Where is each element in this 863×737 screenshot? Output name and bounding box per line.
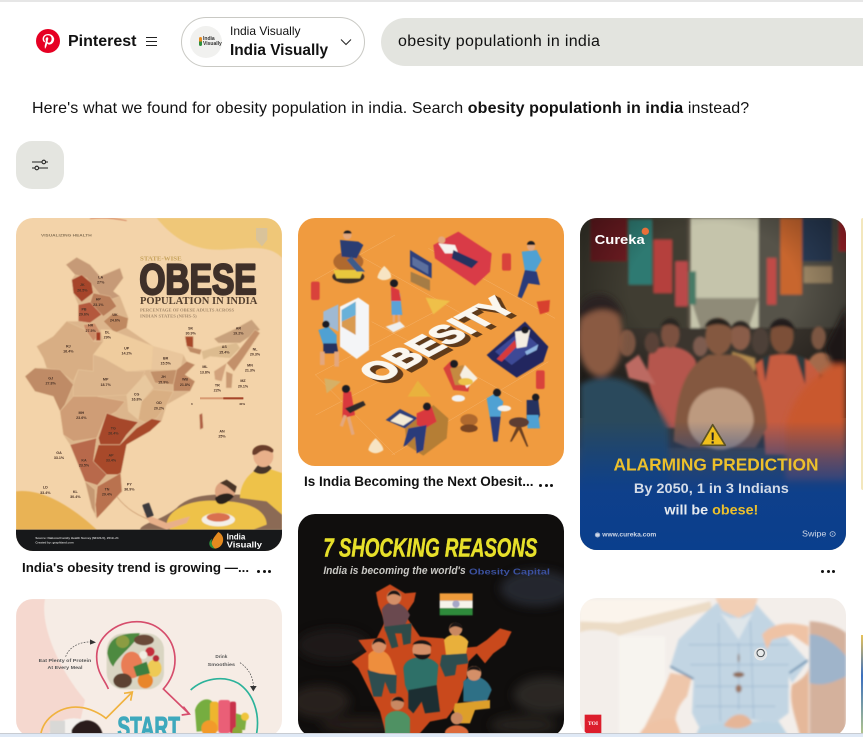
map state labels: AN bbox=[219, 430, 225, 434]
person teal shirt bbox=[453, 666, 492, 723]
pin: weight loss start bbox=[16, 599, 282, 737]
map state labels: 26.5% bbox=[77, 288, 88, 292]
map state labels: 18.7% bbox=[100, 383, 112, 387]
map state labels: 33.1% bbox=[54, 456, 65, 460]
map state labels: 22% bbox=[214, 388, 222, 392]
legend: 0 bbox=[191, 402, 193, 406]
map state labels: LA bbox=[98, 276, 103, 280]
map state labels bbox=[40, 276, 261, 499]
child arm bbox=[640, 673, 692, 737]
map state labels: 29.4% bbox=[102, 493, 113, 497]
heading: obese population: STATE-WISE bbox=[140, 256, 182, 263]
illustration: couple on sofa bbox=[140, 445, 282, 530]
subheadline highlight: Obesity Capital bbox=[469, 567, 550, 577]
fries bbox=[537, 300, 550, 314]
couple at grill bbox=[487, 389, 540, 447]
icon: warning triangle bbox=[701, 425, 725, 447]
blurred hand right bbox=[810, 621, 846, 737]
floor grid bbox=[315, 235, 555, 455]
map state labels: MH bbox=[78, 411, 85, 415]
map state labels: AR bbox=[236, 327, 241, 331]
account avatar: India Visually bbox=[203, 36, 222, 47]
caption: smoothies bbox=[208, 654, 235, 667]
map state labels: JK bbox=[80, 283, 85, 287]
brand name: Pinterest bbox=[68, 33, 136, 50]
map state labels: AS bbox=[222, 345, 227, 349]
blue gradient overlay bbox=[580, 421, 846, 550]
search bar: obesity populationh in india bbox=[398, 33, 600, 50]
swipe hint: Swipe ⊙ bbox=[802, 530, 836, 539]
map state labels: DL bbox=[105, 330, 111, 334]
woman on scale bbox=[386, 279, 405, 332]
map state labels: ML bbox=[202, 365, 208, 369]
neighbouring column edge top bbox=[861, 218, 863, 490]
people illustration bbox=[367, 590, 492, 737]
icons: arrowheads bbox=[90, 639, 257, 691]
map state labels: 15.5% bbox=[160, 361, 172, 365]
source kicker: VISUALIZING HEALTH bbox=[41, 233, 93, 237]
laptop on blue couch bbox=[487, 322, 548, 378]
belly bbox=[724, 715, 752, 728]
map state labels: 27% bbox=[97, 280, 105, 284]
stethoscope bbox=[755, 648, 767, 660]
map state labels: GJ bbox=[48, 376, 53, 380]
map state labels: 23.5% bbox=[79, 464, 90, 468]
photo vignette bbox=[580, 218, 846, 418]
map state labels: 23.1% bbox=[93, 303, 104, 307]
caption: every meal: At Every Meal bbox=[48, 665, 82, 670]
map state labels: JH bbox=[161, 375, 166, 379]
search bar bbox=[381, 18, 863, 66]
smoke clouds bbox=[290, 570, 580, 735]
map state labels: 15.4% bbox=[219, 350, 230, 354]
top border line bbox=[0, 0, 863, 2]
pizza slice 2 bbox=[408, 381, 431, 397]
neck bbox=[715, 598, 758, 618]
pin: obese population map bbox=[16, 218, 282, 551]
map state labels: 14.2% bbox=[121, 352, 133, 356]
map of India bbox=[25, 257, 260, 519]
filter button bbox=[16, 141, 64, 189]
logo: TOI: TOI bbox=[588, 721, 599, 727]
pink blob bbox=[16, 599, 85, 737]
sleeves bbox=[670, 660, 808, 679]
person purple shirt bbox=[382, 590, 412, 648]
sandwich bbox=[324, 378, 341, 393]
map state labels: 13.8% bbox=[200, 370, 211, 374]
map state labels: 21.8% bbox=[180, 383, 191, 387]
map state labels: MP bbox=[103, 378, 109, 382]
plaid lines bbox=[689, 621, 789, 721]
map state labels: 27.5% bbox=[85, 329, 97, 333]
map state labels: CG bbox=[134, 392, 140, 396]
blurred photo bbox=[580, 598, 846, 737]
caption: protein: Eat Plenty of Protein bbox=[39, 658, 91, 663]
pin: 7 shocking reasons bbox=[298, 514, 564, 733]
illustrations bbox=[311, 231, 550, 456]
icon: chevron bbox=[340, 39, 352, 46]
word: OBESITY: OBESITY bbox=[349, 292, 526, 388]
map state labels: 20.1% bbox=[238, 384, 249, 388]
blurred left man bbox=[578, 294, 669, 488]
subheadline: By 2050, 1 in 3 Indians bbox=[634, 481, 789, 496]
woman portrait bbox=[47, 718, 103, 737]
person on burger bbox=[332, 231, 365, 283]
collar V shadow bbox=[720, 613, 753, 640]
map state labels: 29% bbox=[104, 335, 112, 339]
map state labels: WB bbox=[182, 378, 188, 382]
map state labels: BR bbox=[163, 356, 169, 360]
heading: obese population: POPULATION IN INDIA bbox=[140, 296, 258, 307]
icon: crest bbox=[256, 228, 267, 246]
sofa sleeper bbox=[433, 232, 492, 286]
street backdrop photo bbox=[580, 218, 849, 448]
account label: India Visually bbox=[230, 24, 300, 38]
map state labels: NL bbox=[253, 347, 258, 351]
dumpling 2 bbox=[368, 438, 383, 453]
man walking bbox=[518, 241, 542, 298]
map state labels: 33.4% bbox=[106, 459, 117, 463]
map state labels: PB bbox=[81, 308, 87, 312]
logo: India Visually bbox=[209, 532, 263, 549]
pin 2 options bbox=[539, 484, 553, 487]
map state labels: UK bbox=[112, 313, 118, 317]
legend bbox=[191, 397, 245, 406]
logo: India Visually: India bbox=[227, 533, 246, 542]
pin 2 title: Is India Becoming the Next Obesit... bbox=[304, 474, 534, 489]
burger bbox=[460, 414, 478, 432]
person orange shirt bbox=[367, 638, 397, 697]
map state labels: 33.4% bbox=[40, 491, 51, 495]
caption: smoothies: Smoothies bbox=[208, 662, 235, 667]
subheadline bbox=[634, 481, 789, 518]
map state labels: 24.6% bbox=[110, 318, 121, 322]
doctor's arm bbox=[762, 624, 809, 650]
footer bar: Created by: graphland.com bbox=[35, 541, 74, 545]
can right lower bbox=[536, 370, 545, 389]
map state labels: PY bbox=[127, 482, 132, 486]
map state labels: MN bbox=[247, 364, 253, 368]
map state labels: 30.4% bbox=[70, 495, 81, 499]
footer bar bbox=[16, 530, 282, 551]
map state labels: AP bbox=[108, 453, 114, 457]
map state labels: 20.3% bbox=[250, 352, 261, 356]
pin 3 options bbox=[821, 570, 835, 573]
caption: smoothies: Drink bbox=[215, 654, 228, 659]
icon: sliders bbox=[32, 160, 48, 170]
pin: alarming prediction bbox=[580, 218, 846, 550]
pin: child obesity photo bbox=[580, 598, 846, 733]
headline: ALARMING PREDICTION bbox=[613, 455, 818, 475]
dumpling bbox=[377, 266, 391, 280]
map state labels: UP bbox=[124, 347, 130, 351]
pin: obesity isometric illustration bbox=[298, 218, 564, 466]
person yellow shirt bbox=[440, 622, 468, 677]
subheadline: India is becoming the world's bbox=[323, 565, 466, 577]
crowd photo bbox=[618, 318, 839, 455]
blurred foreground figures bbox=[578, 294, 846, 488]
map state labels: 30.9% bbox=[185, 332, 197, 336]
person in egg chair bbox=[443, 360, 478, 402]
map state labels: 29.6% bbox=[79, 312, 90, 316]
fridge with person bbox=[318, 298, 369, 367]
smoothies illustration bbox=[195, 699, 249, 737]
tv bbox=[410, 250, 432, 291]
icon: menu bbox=[146, 37, 157, 46]
heading: obese population: PERCENTAGE OF OBESE ADULTS ACROSS bbox=[140, 308, 235, 313]
website: ◉ www.cureka.com bbox=[595, 533, 656, 539]
can right bbox=[502, 253, 511, 271]
subheadline: will be obese! bbox=[663, 503, 758, 518]
map state labels: TR bbox=[215, 383, 220, 387]
legend: 40% bbox=[239, 402, 245, 406]
account avatar bbox=[190, 26, 222, 58]
right blurred shoulder bbox=[785, 358, 846, 481]
map state labels: RJ bbox=[66, 344, 71, 348]
map state labels: KL bbox=[73, 490, 79, 494]
map state labels: HP bbox=[96, 298, 101, 302]
map state labels: MZ bbox=[240, 379, 246, 383]
heading: obese population bbox=[139, 256, 258, 318]
background blobs bbox=[16, 218, 282, 530]
central shirtless man bbox=[674, 318, 767, 450]
logo: TOI bbox=[585, 715, 601, 733]
map state labels: 16.8% bbox=[131, 397, 143, 401]
logo: Cureka bbox=[595, 228, 649, 247]
man on armchair bbox=[403, 403, 448, 456]
account selector bbox=[181, 17, 365, 67]
map state labels: KA bbox=[81, 458, 87, 462]
arrow path bbox=[41, 622, 258, 735]
pizza slice bbox=[426, 298, 450, 314]
logo: India Visually: Visually bbox=[227, 540, 263, 549]
pin 1 options bbox=[257, 570, 271, 573]
map state labels: LD bbox=[43, 486, 48, 490]
button gaps bbox=[733, 672, 744, 677]
back crowd bbox=[618, 318, 839, 455]
account name: India Visually bbox=[230, 42, 328, 59]
map state labels: 21.3% bbox=[245, 369, 256, 373]
neighbouring column edge lower bbox=[861, 635, 863, 737]
map state labels: 26.4% bbox=[108, 432, 119, 436]
footer bar: Source: National Family Health Survey (NFHS-5), 2019–21 bbox=[35, 536, 119, 540]
icon: pinterest logo bbox=[36, 29, 60, 53]
icon: India flag bbox=[440, 593, 473, 615]
belly and shorts bbox=[695, 721, 789, 737]
pin 1 title: India's obesity trend is growing —... bbox=[22, 560, 249, 575]
map state labels: TN bbox=[105, 487, 110, 491]
can left bbox=[311, 282, 320, 300]
bearded man bbox=[403, 640, 440, 713]
logo: Cureka: Cureka bbox=[595, 232, 645, 247]
icon: warning triangle: ! bbox=[710, 430, 715, 447]
map of India bbox=[352, 584, 512, 737]
shirt bbox=[670, 603, 808, 726]
map state labels: HR bbox=[88, 324, 94, 328]
map state labels: 20.2% bbox=[154, 406, 165, 410]
heading: obese population: INDIAN STATES (NFHS-5) bbox=[140, 313, 197, 318]
map state labels: 36.9% bbox=[124, 488, 135, 492]
person bottom bbox=[445, 712, 468, 737]
food plate bbox=[107, 633, 164, 689]
woman with tray bbox=[340, 385, 366, 435]
map state labels: 19.2% bbox=[233, 332, 244, 336]
map state labels: SK bbox=[188, 327, 194, 331]
map state labels: GA bbox=[56, 451, 62, 455]
map state labels: 23.6% bbox=[76, 416, 87, 420]
map state labels: 25% bbox=[218, 435, 226, 439]
bottom browser strip bbox=[0, 733, 863, 737]
map state labels: TG bbox=[111, 426, 116, 430]
person green shirt bbox=[385, 697, 410, 737]
map state labels: 15.9% bbox=[158, 380, 169, 384]
search correction message: Here's what we found for obesity population in india. Search obesity populationh in india instead? bbox=[32, 100, 749, 117]
map state labels: OD bbox=[156, 401, 162, 405]
map state labels: 16.4% bbox=[63, 349, 74, 353]
map state labels: 27.8% bbox=[45, 381, 57, 385]
dining table bbox=[386, 409, 418, 428]
